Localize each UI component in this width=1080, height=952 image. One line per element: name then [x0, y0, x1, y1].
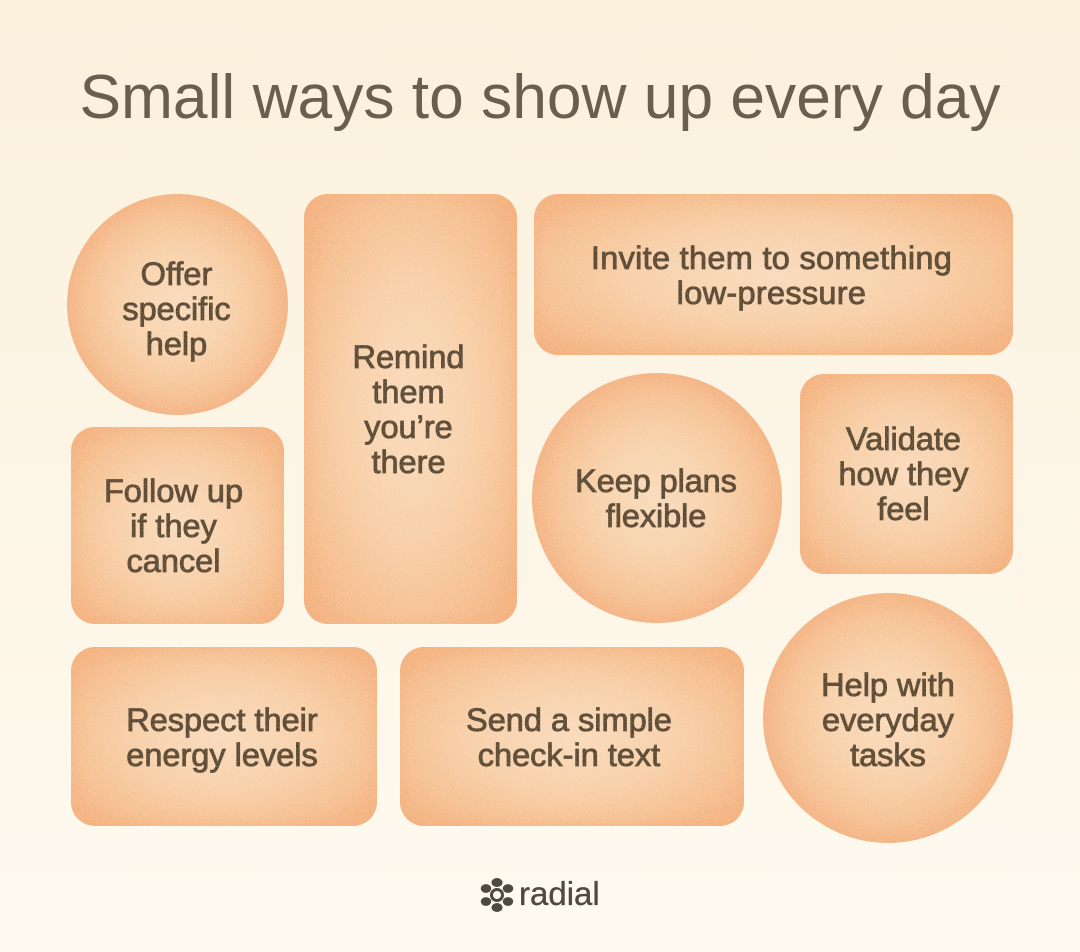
card: respect their energy levels: Respect their: [126, 702, 318, 738]
card: remind them you're there: you’re: [364, 409, 453, 445]
card: remind them you're there: them: [372, 374, 445, 410]
card: remind them you're there: [304, 194, 517, 624]
card: validate how they feel: feel: [877, 490, 930, 526]
title: Small ways to show up every day: [79, 63, 1000, 132]
card: keep plans flexible: flexible: [606, 498, 706, 534]
card: follow up if they cancel: [71, 427, 284, 624]
card: help with everyday tasks: everyday: [822, 702, 954, 738]
card: offer specific help: specific: [122, 291, 231, 327]
card: invite them to something low-pressure: low-pressure: [677, 274, 866, 310]
card: send a simple check-in text: check-in text: [478, 736, 660, 772]
card: remind them you're there: there: [371, 444, 446, 480]
card: send a simple check-in text: [400, 647, 744, 826]
card: help with everyday tasks: [763, 593, 1013, 843]
grain texture overlay: [67, 194, 1013, 843]
card: help with everyday tasks: tasks: [850, 736, 926, 772]
icon: flower: [480, 878, 514, 912]
card: validate how they feel: Validate: [846, 420, 961, 456]
card: remind them you're there: Remind: [352, 339, 464, 375]
card: follow up if they cancel: cancel: [127, 543, 220, 579]
card: respect their energy levels: [71, 647, 377, 826]
card: respect their energy levels: energy levels: [126, 736, 318, 772]
card: follow up if they cancel: Follow up: [104, 473, 243, 509]
card: offer specific help: [67, 194, 288, 415]
logo wordmark: radial: [519, 875, 600, 912]
card: offer specific help: help: [146, 326, 207, 362]
card: offer specific help: Offer: [141, 256, 212, 292]
card: follow up if they cancel: if they: [130, 508, 217, 544]
card: help with everyday tasks: Help with: [821, 666, 955, 702]
card: keep plans flexible: [532, 373, 782, 623]
card: validate how they feel: how they: [838, 456, 969, 492]
card: keep plans flexible: Keep plans: [575, 463, 737, 499]
card: validate how they feel: [800, 374, 1013, 574]
card: invite them to something low-pressure: Invite them to something: [591, 240, 952, 276]
card: invite them to something low-pressure: [534, 194, 1013, 355]
card: send a simple check-in text: Send a simple: [466, 702, 672, 738]
logo: radial: [480, 875, 600, 912]
